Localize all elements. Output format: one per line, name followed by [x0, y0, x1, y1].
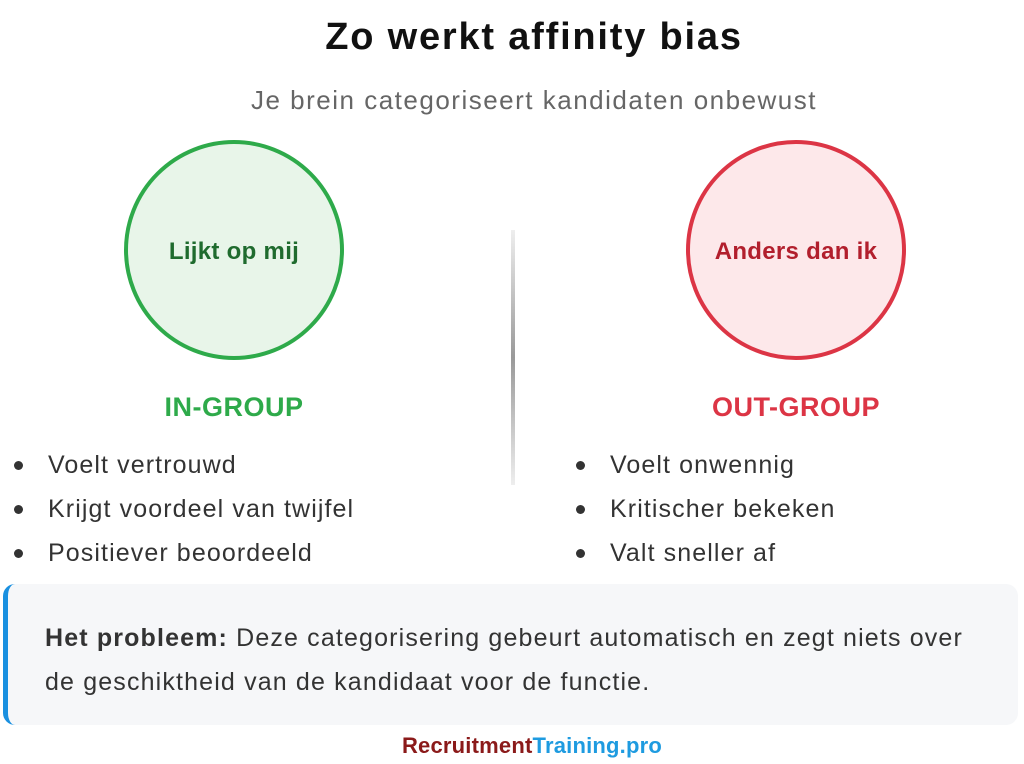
- callout: de geschiktheid van de kandidaat voor de functie.: [45, 668, 650, 696]
- callout: [3, 584, 1018, 725]
- heading: in-group: IN-GROUP: [164, 392, 304, 422]
- heading: out-group: OUT-GROUP: [712, 392, 880, 422]
- list: in-group: [14, 451, 354, 567]
- list: in-group: Krijgt voordeel van twijfel: [48, 495, 354, 523]
- list: in-group: Voelt vertrouwd: [48, 451, 237, 479]
- logo: RecruitmentTraining.pro: [402, 733, 662, 758]
- subtitle: Je brein categoriseert kandidaten onbewust: [251, 85, 817, 115]
- circle: in-group: [124, 140, 344, 360]
- divider: [511, 230, 515, 485]
- circle: out-group: [686, 140, 906, 360]
- circle: out-group: Anders dan ik: [715, 238, 877, 265]
- list: in-group: Positiever beoordeeld: [48, 539, 313, 567]
- list: out-group: Valt sneller af: [610, 539, 776, 567]
- circle: in-group: Lijkt op mij: [169, 238, 299, 265]
- callout: Het probleem: Deze categorisering gebeurt automatisch en zegt niets over: [45, 624, 963, 652]
- list: out-group: Voelt onwennig: [610, 451, 795, 479]
- list: out-group: Kritischer bekeken: [610, 495, 835, 523]
- list: out-group: [576, 451, 835, 567]
- title: Zo werkt affinity bias: [325, 16, 743, 58]
